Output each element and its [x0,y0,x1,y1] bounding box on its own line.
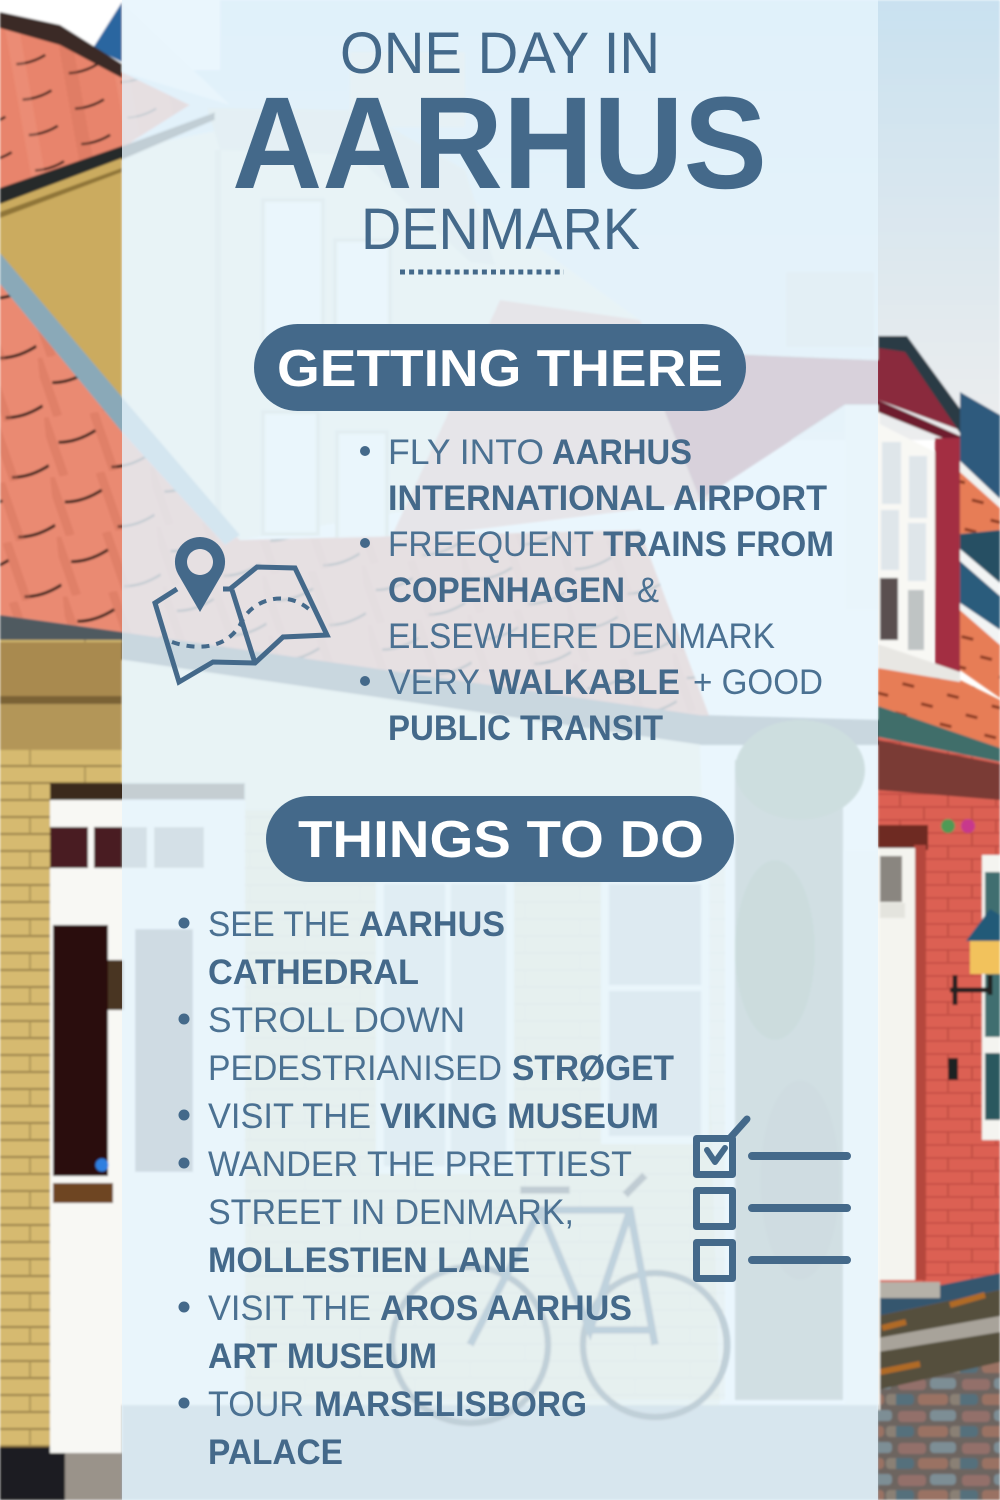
list: getting there: INTERNATIONAL AIRPORT [388,479,827,518]
yellow wall [0,158,122,400]
right gutter [878,706,1000,762]
section heading: getting there [254,324,746,411]
list: things to do: VISIT THE [208,1289,371,1328]
list: things to do: ART MUSEUM [208,1337,437,1376]
list: things to do: VISIT THE [208,1097,371,1136]
list: things to do: AROS AARHUS [380,1289,632,1328]
list: things to do: PALACE [208,1433,343,1472]
list: things to do: CATHEDRAL [208,953,419,992]
list: things to do: STRØGET [512,1049,674,1088]
right pavement [878,1273,1000,1500]
list: getting there: & [637,571,659,610]
list: things to do: PEDESTRIANISED [208,1049,502,1088]
list: things to do: AARHUS [359,905,505,944]
title line: Denmark: DENMARK [361,197,640,262]
section heading: getting there: GETTING THERE [277,340,723,398]
lower left wall [0,640,125,1500]
title line: Aarhus: AARHUS [232,69,767,216]
bicycle and ground [122,1175,878,1500]
list: getting there: + GOOD [693,663,823,702]
icon: map with location pin [155,537,327,682]
section heading: things to do: THINGS TO DO [298,811,704,869]
list: getting there: TRAINS FROM [603,525,834,564]
list: things to do: TOUR [208,1385,304,1424]
list: getting there: WALKABLE [489,663,680,702]
icon: checklist [696,1119,847,1278]
list: getting there: FREEQUENT [388,525,594,564]
list: things to do: VIKING MUSEUM [380,1097,659,1136]
list: getting there: VERY [388,663,480,702]
gutter [0,615,880,745]
list: getting there: COPENHAGEN [388,571,625,610]
list: getting there: AARHUS [552,433,692,472]
list: getting there [360,433,834,748]
white door [50,783,245,1453]
list: things to do: SEE THE [208,905,350,944]
list: getting there: PUBLIC TRANSIT [388,709,663,748]
left tile roof and flashing [0,253,720,745]
cream house under panel [122,660,725,1410]
translucent text panel [122,0,878,1500]
list: things to do: WANDER THE PRETTIEST [208,1145,632,1184]
list: getting there: FLY INTO [388,433,544,472]
dotted divider [400,270,564,274]
red dormer [640,336,977,675]
title [232,21,767,262]
top left tile roof [0,2,230,206]
list: getting there: ELSEWHERE DENMARK [388,617,775,656]
right brick wall [878,737,1000,1320]
list: things to do: STROLL DOWN [208,1001,465,1040]
list: things to do: MARSELISBORG [314,1385,587,1424]
vine and shrubs under panel [735,720,880,1410]
right blue roofs and orange tiles [878,392,1000,750]
list: things to do: MOLLESTIEN LANE [208,1241,530,1280]
section heading: things to do [266,796,734,882]
title line: one day in: ONE DAY IN [340,21,660,86]
chimney and upper facade [122,52,874,540]
list: things to do [178,905,674,1472]
list: things to do: STREET IN DENMARK, [208,1193,574,1232]
